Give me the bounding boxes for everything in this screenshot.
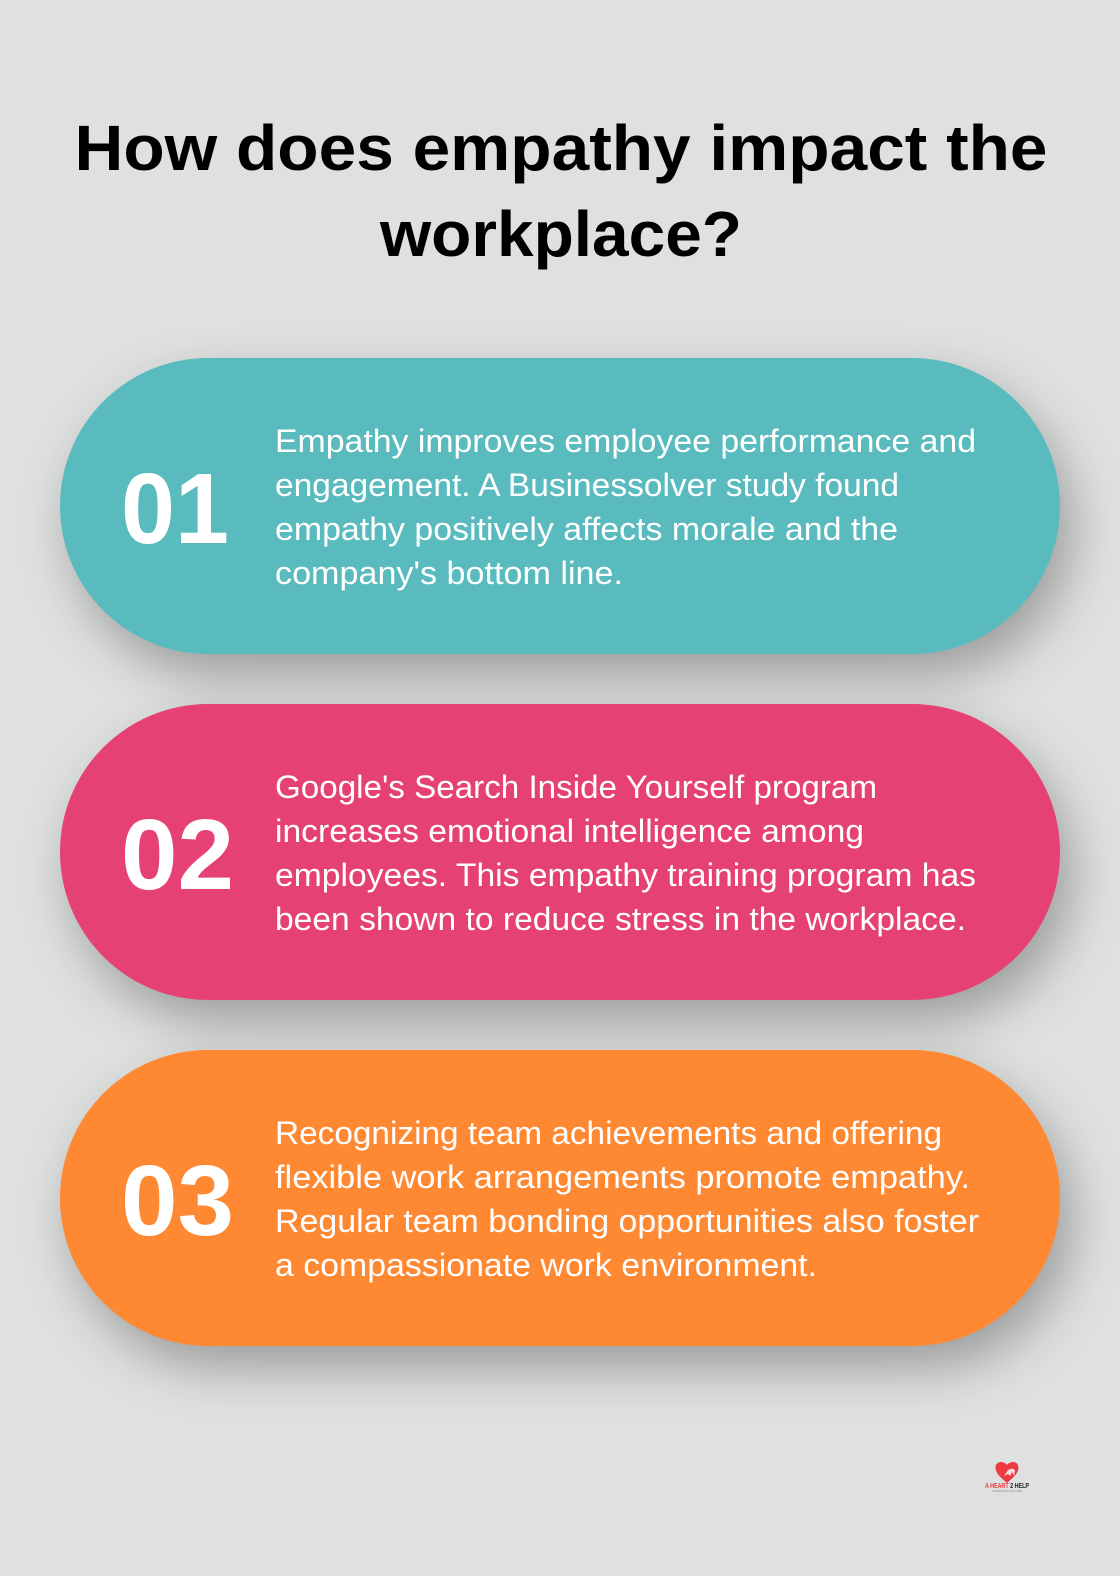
title: workplace? xyxy=(379,198,742,270)
panel: 02 xyxy=(60,704,1060,1000)
text block 02: employees. This empathy training program has xyxy=(275,857,976,893)
text block 02: increases emotional intelligence among xyxy=(275,813,864,849)
title: How does empathy impact the xyxy=(74,112,1048,184)
number 01: 01 xyxy=(121,453,229,565)
text block 02 xyxy=(275,769,976,937)
logo wordmark: A HEART 2 HELP xyxy=(985,1483,1029,1490)
text block 03: Recognizing team achievements and offering xyxy=(275,1115,942,1151)
number 03: 03 xyxy=(121,1145,234,1257)
text block 03: flexible work arrangements promote empathy. xyxy=(275,1159,970,1195)
text block 03: a compassionate work environment. xyxy=(275,1247,817,1283)
text block 03: Regular team bonding opportunities also foster xyxy=(275,1203,979,1239)
text block 03 xyxy=(275,1115,979,1283)
text block 01: company's bottom line. xyxy=(275,555,623,591)
text block 01 xyxy=(275,423,976,591)
text block 01: Empathy improves employee performance and xyxy=(275,423,976,459)
number 02: 02 xyxy=(121,799,234,911)
icon: heart with hands xyxy=(996,1462,1018,1483)
panel: 03 xyxy=(60,1050,1060,1346)
logo: A Heart 2 Help xyxy=(985,1462,1029,1493)
text block 02: been shown to reduce stress in the workplace. xyxy=(275,901,966,937)
text block 01: engagement. A Businessolver study found xyxy=(275,467,899,503)
text block 01: empathy positively affects morale and the xyxy=(275,511,898,547)
logo tagline: COMPASSION AND CARE xyxy=(992,1490,1022,1493)
title xyxy=(74,112,1048,270)
text block 02: Google's Search Inside Yourself program xyxy=(275,769,877,805)
panel: 01 xyxy=(60,358,1060,654)
